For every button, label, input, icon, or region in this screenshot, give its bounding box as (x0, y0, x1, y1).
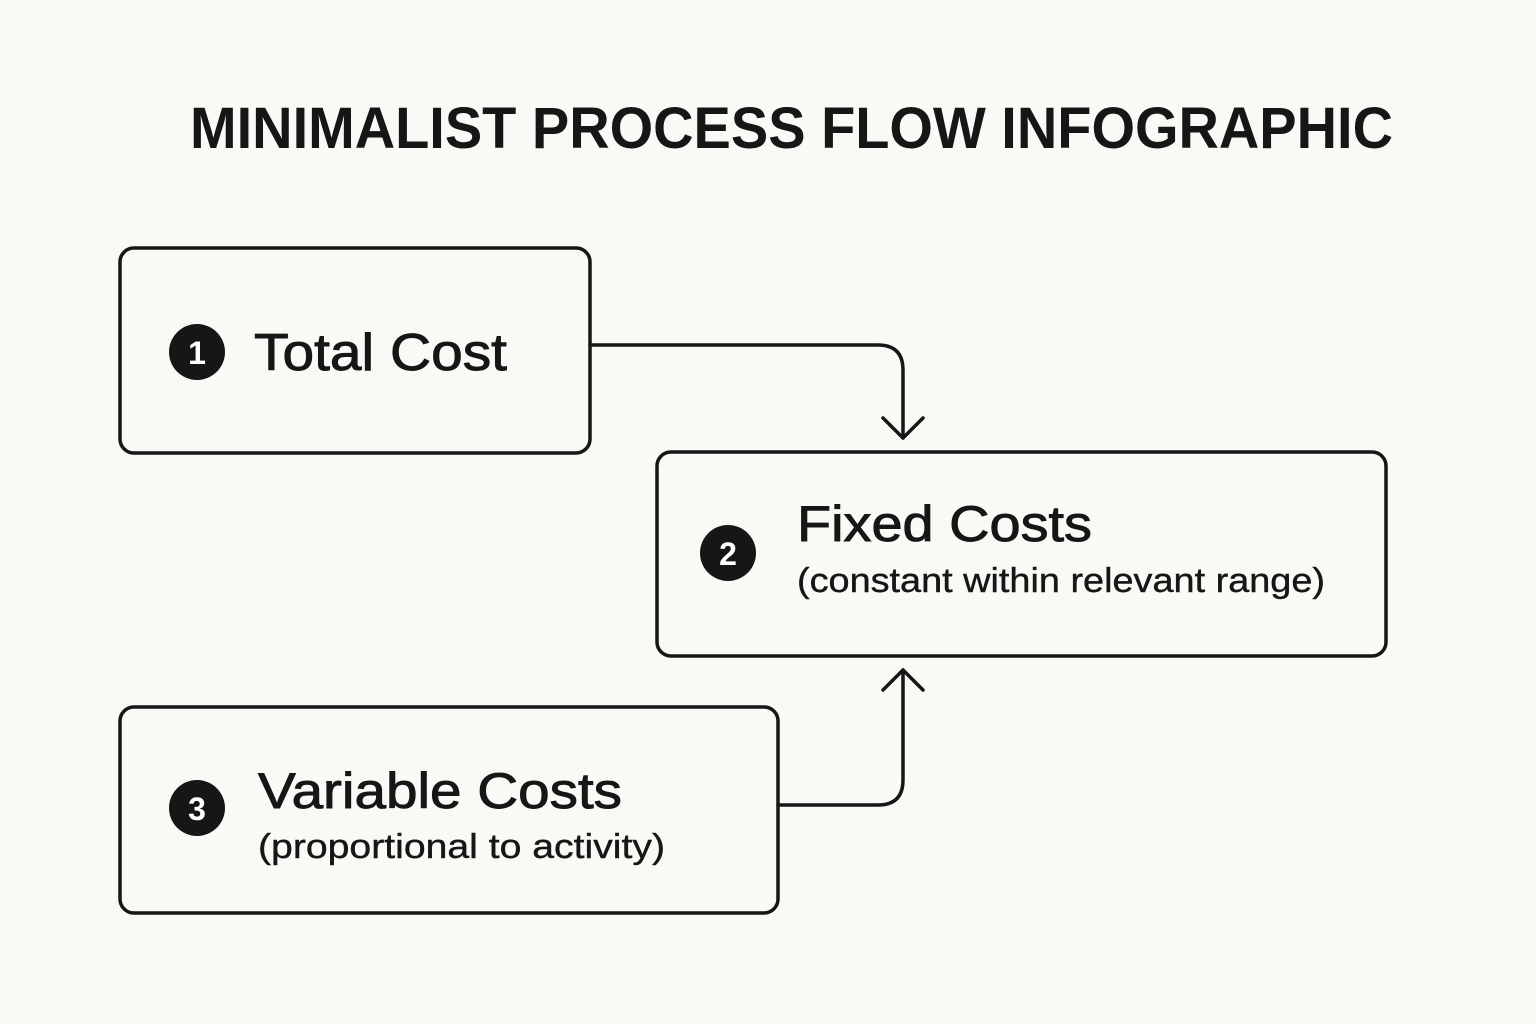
arrow: variable costs to fixed costs (778, 670, 923, 805)
panel: variable costs (120, 707, 778, 913)
heading: total cost: Total Cost (254, 324, 508, 382)
icon: number 1 (169, 324, 225, 380)
panel: total cost (120, 248, 590, 453)
heading: fixed costs: Fixed Costs (797, 496, 1092, 552)
icon: number 1: 1 (188, 335, 206, 371)
icon: number 3 (169, 780, 225, 836)
icon: number 2: 2 (719, 536, 737, 572)
title: MINIMALIST PROCESS FLOW INFOGRAPHIC (190, 96, 1393, 161)
icon: number 3: 3 (188, 791, 206, 827)
heading: variable costs: Variable Costs (258, 763, 622, 819)
text: fixed costs description: (constant within relevant range) (797, 562, 1325, 600)
icon: number 2 (700, 525, 756, 581)
panel: fixed costs (657, 452, 1386, 656)
arrow: total cost to fixed costs (590, 345, 923, 438)
text: variable costs description: (proportional to activity) (258, 828, 665, 866)
